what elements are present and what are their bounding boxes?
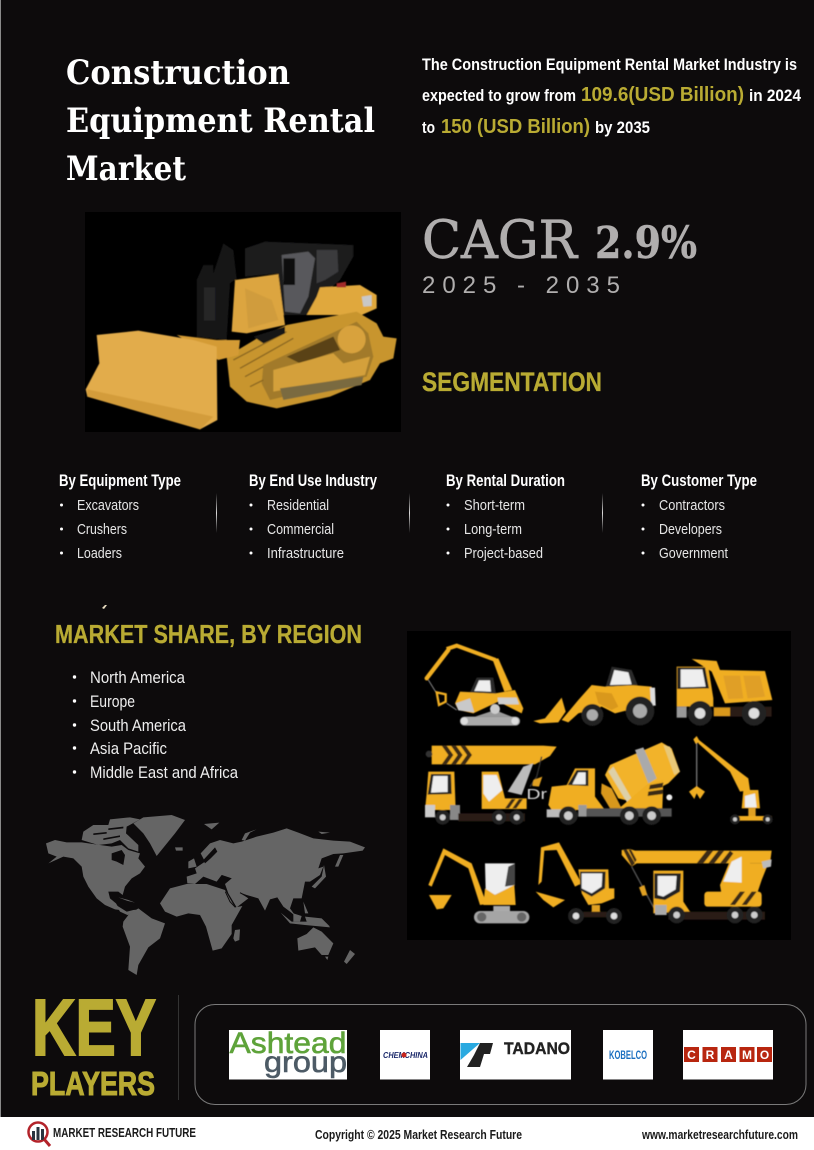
crane truck [622,849,772,923]
concrete mixer truck [547,742,680,825]
region list: South America [90,716,186,735]
segment: by end use industry: Infrastructure [267,545,344,562]
copyright: Copyright © 2025 Market Research Future [315,1128,522,1142]
region heading: MARKET SHARE, BY REGION [55,619,362,649]
image: construction vehicles [407,631,791,940]
region list: Asia Pacific [90,739,167,758]
mobile crane truck [425,746,557,825]
logo: Tadano [460,1030,571,1080]
market growth summary: in 2024 [749,87,802,105]
footer bar [0,1117,814,1150]
market growth summary: expected to grow from [422,87,576,105]
segment: by customer type: By Customer Type [641,472,757,490]
segment: by end use industry: Residential [267,497,329,514]
segment: by customer type [641,472,757,562]
segment: by equipment type: Crushers [77,521,127,538]
segment: by end use industry: By End Use Industry [249,472,378,490]
key players heading: PLAYERS [31,1065,155,1102]
CAGR figure: CAGR [422,211,579,271]
logo: Ashtead group: Ashtead [230,1027,346,1060]
vehicles row 3 [428,842,772,924]
title: Construction [66,53,290,93]
dump truck [677,659,772,726]
logo: Cramo [683,1030,773,1080]
market growth summary [422,56,802,138]
segment: by end use industry [249,472,378,562]
segment: by customer type: Government [659,545,729,562]
CAGR figure: 2.9% [595,218,697,269]
region list: North America [90,668,185,687]
vehicles row 2 [425,736,773,825]
market growth summary: by 2035 [595,119,650,137]
segment: by equipment type: Excavators [77,497,139,514]
segment: by rental duration: Long-term [464,521,522,538]
segmentation heading: SEGMENTATION [422,367,602,397]
region list: Europe [90,692,135,711]
logo: Kobelco [603,1030,653,1080]
key players heading [31,983,156,1102]
segment: by rental duration [446,472,565,562]
CAGR figure [422,211,697,299]
icon: market research future logo [28,1122,50,1146]
logo: Ashtead group [229,1027,347,1080]
key players panel [195,1004,806,1104]
logo: Kobelco: KOBELCO [609,1048,647,1062]
world map [46,815,365,975]
segment: by customer type: Developers [659,521,722,538]
mobile crane truck: Dr [526,787,547,803]
region list: Middle East and Africa [90,763,238,782]
logo: Cramo: C [687,1048,696,1062]
segment: by customer type: Contractors [659,497,725,514]
grabber crane [689,736,773,824]
title: Equipment Rental [66,101,375,141]
segment: by equipment type: By Equipment Type [59,472,181,490]
logo: ChemChina: CHEMCHINA [383,1050,428,1060]
vehicles row 1 [427,646,772,726]
image: bulldozer [85,212,401,432]
segment: by equipment type [59,472,181,562]
segment: by rental duration: Project-based [464,545,543,562]
market growth summary: 150 (USD Billion) [441,116,590,138]
logo: Ashtead group: group [264,1046,347,1079]
mini excavator on tracks [428,848,529,923]
region list [73,668,238,782]
title: Market [66,149,186,189]
market growth summary: to [422,119,435,137]
CAGR figure: 2025 - 2035 [422,272,620,299]
backhoe [536,842,622,924]
logo: Tadano: TADANO [504,1039,570,1058]
segment: by rental duration: By Rental Duration [446,472,565,490]
excavator on tracks [427,646,523,726]
market growth summary: 109.6(USD Billion) [581,84,744,106]
logo: ChemChina [380,1030,430,1080]
wheel loader [533,667,656,726]
logo: Cramo: A [724,1048,733,1062]
footer brand: MARKET RESEARCH FUTURE [53,1126,196,1140]
key players heading: KEY [32,983,156,1072]
segment: by equipment type: Loaders [77,545,122,562]
logo: Cramo: R [706,1048,715,1062]
title [66,53,375,189]
logo: Cramo: O [760,1048,769,1062]
segment: by rental duration: Short-term [464,497,525,514]
segment: by end use industry: Commercial [267,521,334,538]
logo: Cramo: M [742,1048,752,1062]
